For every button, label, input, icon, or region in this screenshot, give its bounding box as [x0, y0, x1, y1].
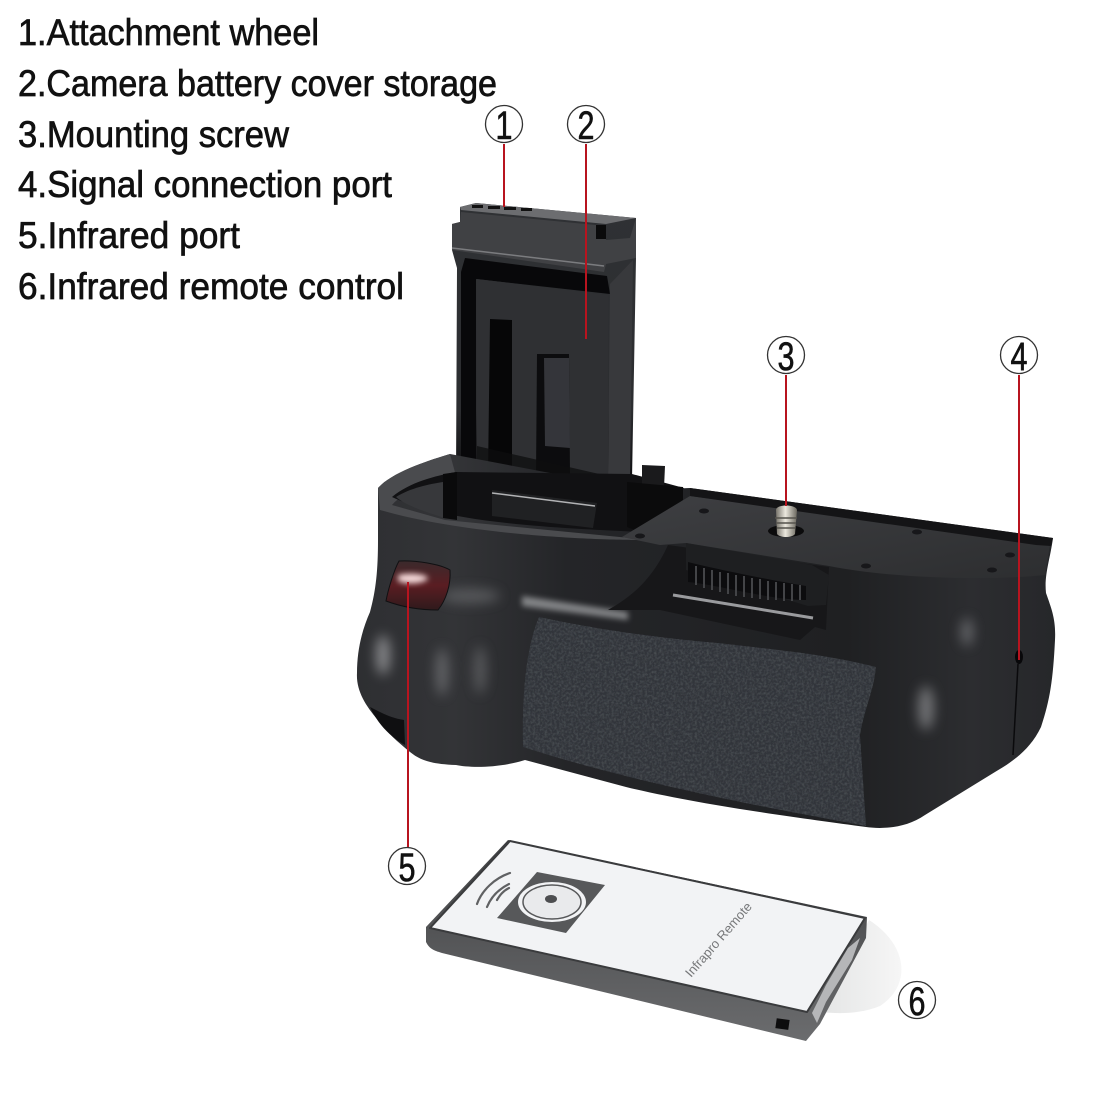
grip notch: [370, 707, 405, 745]
callout 1: [486, 104, 522, 148]
parts list: [18, 12, 497, 307]
callout numbers: [388, 104, 1038, 1024]
callout 6: [898, 980, 936, 1024]
callout 3: [768, 335, 804, 379]
wheel recess: [608, 545, 829, 640]
top plate: [622, 496, 1050, 578]
callout 1: 1: [496, 104, 512, 148]
remote brand text: Infrapro Remote: [682, 899, 755, 980]
remote battery door: [812, 938, 860, 1023]
remote top face: [430, 841, 865, 1012]
parts list: 3.Mounting screw: [18, 114, 289, 155]
battery grip photo illustration: [357, 203, 1055, 828]
callout 4: 4: [1010, 335, 1028, 379]
body top rim: [378, 454, 640, 540]
parts list: 5.Infrared port: [18, 215, 241, 256]
battery compartment: [392, 472, 684, 532]
infrared port: [386, 561, 450, 610]
parts list: 4.Signal connection port: [18, 164, 393, 205]
battery cover door: [452, 203, 636, 480]
rubber grip panel: [523, 617, 876, 826]
callout 2: [568, 104, 604, 148]
remote sensor: [775, 1018, 790, 1030]
callout leader lines: [408, 144, 1019, 848]
grip body: [357, 454, 1055, 828]
callout 2: 2: [578, 104, 594, 148]
callout 3: 3: [778, 335, 794, 379]
signal connection port: [1015, 650, 1023, 664]
signal waves: [477, 873, 510, 907]
mounting screw: [768, 506, 804, 537]
callout 4: [1000, 335, 1038, 379]
remote shadow: [820, 920, 901, 1013]
remote body: [426, 840, 867, 1041]
callout 6: 6: [908, 980, 926, 1024]
body highlights: [376, 589, 973, 730]
remote button: [518, 882, 586, 922]
parts list: 6.Infrared remote control: [18, 266, 404, 307]
parts list: 1.Attachment wheel: [18, 12, 319, 53]
callout 5: 5: [398, 846, 416, 890]
infrared remote control: [426, 840, 867, 1041]
attachment wheel: [686, 543, 829, 606]
callout 5: [388, 846, 426, 890]
remote button square: [497, 872, 605, 933]
door slots: [488, 319, 512, 476]
parts list: 2.Camera battery cover storage: [18, 63, 497, 104]
